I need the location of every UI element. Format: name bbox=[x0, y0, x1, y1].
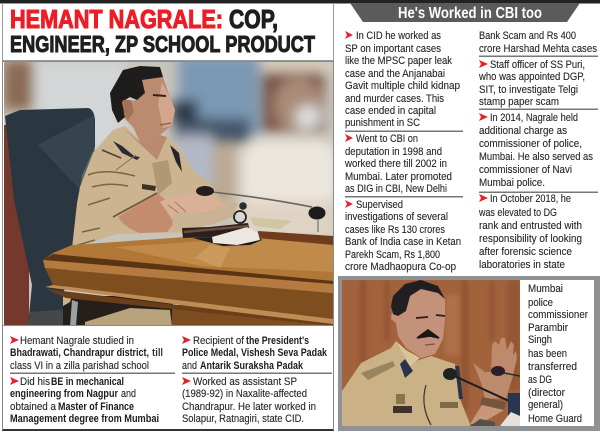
bullet: investigations: Parekh Scam, Rs 1,800 bbox=[345, 249, 440, 261]
bullet: medals: Antarik Suraksha Padak bbox=[200, 360, 304, 372]
bullet: early postings: Chandrapur. He later worked in bbox=[182, 401, 316, 413]
uniform bbox=[342, 341, 470, 426]
officer uniform bbox=[72, 126, 222, 248]
heading ribbon: He's Worked in CBI too bbox=[350, 3, 580, 22]
bullet: CID cases bbox=[345, 30, 460, 129]
panel: Parambir Singh photo with caption bbox=[338, 276, 600, 431]
bullet: degrees: obtained a bbox=[10, 401, 57, 413]
bullet: October 2018: was elevated to DG bbox=[478, 207, 557, 219]
reddish wood at far left bbox=[3, 125, 29, 326]
bullet: CBI deputation: deputation in 1998 and bbox=[345, 146, 442, 158]
bullet: CID cases: punishment in SC bbox=[345, 117, 420, 129]
caption: police bbox=[528, 297, 553, 309]
bullet: degrees: Did his bbox=[20, 376, 50, 388]
officer cap bbox=[172, 202, 262, 246]
bullet: CBI deputation: worked there till 2002 in bbox=[344, 158, 447, 170]
blurred background figures bbox=[3, 55, 337, 240]
caption: general) bbox=[528, 399, 563, 411]
caption: has been bbox=[528, 348, 567, 360]
caption: Mumbai bbox=[528, 283, 563, 295]
bullet: early postings: Solapur, Ratnagiri, state CID. bbox=[182, 413, 304, 425]
bullet: staff officer: stamp paper scam bbox=[479, 96, 559, 108]
bullet: early postings bbox=[182, 376, 316, 425]
bullet: degrees: Master of Finance bbox=[58, 401, 134, 413]
bullet: investigations: Bank of India case in Ketan bbox=[345, 236, 461, 248]
panel: title bbox=[2, 4, 334, 60]
caption: Singh bbox=[528, 334, 552, 346]
bullet: schooling: Bhadrawati, Chandrapur district, bbox=[10, 347, 149, 359]
stationery on desk bbox=[250, 217, 292, 229]
bullet: October 2018: after forensic science bbox=[479, 246, 572, 258]
bullet: staff officer bbox=[478, 59, 585, 108]
photo: Hemant Nagrale at desk bbox=[3, 55, 337, 326]
desk bbox=[43, 231, 333, 326]
bullet: medals: Recipient of bbox=[193, 335, 245, 347]
continued bullet: scams bbox=[479, 30, 597, 55]
bullet: CBI deputation bbox=[344, 133, 452, 195]
bullet: schooling bbox=[10, 335, 163, 372]
bullet: October 2018: responsibility of looking bbox=[479, 233, 582, 245]
bullet: October 2018 bbox=[478, 193, 582, 271]
title line 1: HEMANT NAGRALE: bbox=[10, 4, 223, 34]
bullet: early postings: (1989-92) in Naxalite-affected bbox=[182, 388, 307, 400]
bullet: CBI deputation: as DIG in CBI, New Delhi bbox=[345, 183, 447, 195]
trousers and under-desk area bbox=[63, 296, 334, 326]
bullet: medals bbox=[182, 335, 328, 372]
officer arm and hand bbox=[113, 193, 226, 233]
officer head bbox=[110, 66, 175, 142]
bullet: investigations: investigations of several bbox=[345, 211, 448, 223]
bullet: medals: Police Medal, Vishesh Seva Padak bbox=[182, 347, 328, 359]
bullet: 2014 charge: Mumbai police. bbox=[479, 177, 545, 189]
photo: Parambir Singh bbox=[342, 280, 520, 426]
caption bbox=[528, 283, 588, 425]
bullet: degrees: BE in mechanical bbox=[51, 376, 124, 388]
bullet: investigations: crore Madhaopura Co-op bbox=[345, 261, 456, 273]
bullet: October 2018: laboratories in state bbox=[479, 259, 565, 271]
title line 2: ENGINEER, ZP SCHOOL PRODUCT bbox=[10, 31, 315, 57]
bullet: October 2018: In October 2018, he bbox=[490, 193, 571, 205]
bullet: CBI deputation: Went to CBI on bbox=[356, 133, 418, 145]
bullet: investigations: cases like Rs 130 crores bbox=[345, 224, 445, 236]
bullet: 2014 charge: commissioner of Navi bbox=[479, 164, 572, 176]
bullet: staff officer: SIT, to investigate Telgi bbox=[479, 84, 578, 96]
caption: as DG bbox=[528, 374, 552, 386]
continued bullet: scams: Bank Scam and Rs 400 bbox=[479, 30, 576, 42]
microphones bbox=[196, 186, 326, 232]
heading ribbon: He's Worked in CBI too: He's Worked in CBI too bbox=[398, 5, 542, 22]
caption: (director bbox=[528, 387, 565, 399]
bullet: schooling: Hemant Nagrale studied in bbox=[20, 335, 134, 347]
chair bbox=[5, 108, 95, 326]
bullet: staff officer: Staff officer of SS Puri, bbox=[490, 59, 585, 71]
panel: biography bullets bbox=[2, 326, 334, 429]
bullet: 2014 charge: additional charge as bbox=[479, 125, 567, 137]
bullet: 2014 charge bbox=[479, 112, 593, 189]
text column: CBI career right bbox=[478, 30, 598, 271]
caption: commissioner bbox=[528, 309, 588, 321]
bullet: degrees: engineering from Nagpur bbox=[10, 388, 119, 400]
bullet: degrees: and bbox=[121, 388, 136, 400]
bullet: CID cases: In CID he worked as bbox=[356, 30, 441, 42]
bullet: October 2018: rank and entrusted with bbox=[479, 220, 582, 232]
bullet: degrees bbox=[10, 376, 159, 425]
text column: CBI career left bbox=[344, 30, 463, 273]
microphones bbox=[456, 376, 508, 402]
bullet: CID cases: case and the Anjanabai bbox=[345, 68, 445, 80]
bullet: CID cases: Gavit multiple child kidnap bbox=[345, 80, 460, 92]
bullet: 2014 charge: commissioner of police, bbox=[479, 138, 582, 150]
title line 1: COP, bbox=[229, 4, 278, 34]
bullet: CID cases: and murder cases. This bbox=[345, 93, 444, 105]
bullet: schooling: till bbox=[152, 347, 163, 359]
bullet: early postings: Worked as assistant SP bbox=[193, 376, 297, 388]
bullet: degrees: Management degree from Mumbai bbox=[10, 413, 159, 425]
bullet: investigations: Supervised bbox=[356, 199, 403, 211]
bullet: CID cases: SP on important cases bbox=[345, 43, 441, 55]
bullet: schooling: class VI in a zilla parishad school bbox=[10, 360, 149, 372]
head bbox=[391, 286, 445, 358]
bullet: 2014 charge: In 2014, Nagrale held bbox=[490, 112, 578, 124]
top rule bbox=[0, 0, 600, 4]
bullet: CBI deputation: Mumbai. Later promoted bbox=[345, 171, 452, 183]
bullet: investigations bbox=[345, 199, 461, 273]
bullet: CID cases: case ended in capital bbox=[345, 105, 436, 117]
bullet: CID cases: like the MPSC paper leak bbox=[345, 55, 452, 67]
caption: Parambir bbox=[528, 322, 568, 334]
bullet: medals: and bbox=[182, 360, 197, 372]
panel frame: photo bbox=[2, 62, 334, 326]
caption: Home Guard bbox=[528, 413, 582, 425]
raised hand bbox=[473, 338, 517, 399]
bullet: medals: the President's bbox=[246, 335, 309, 347]
caption: transferred bbox=[528, 361, 577, 373]
